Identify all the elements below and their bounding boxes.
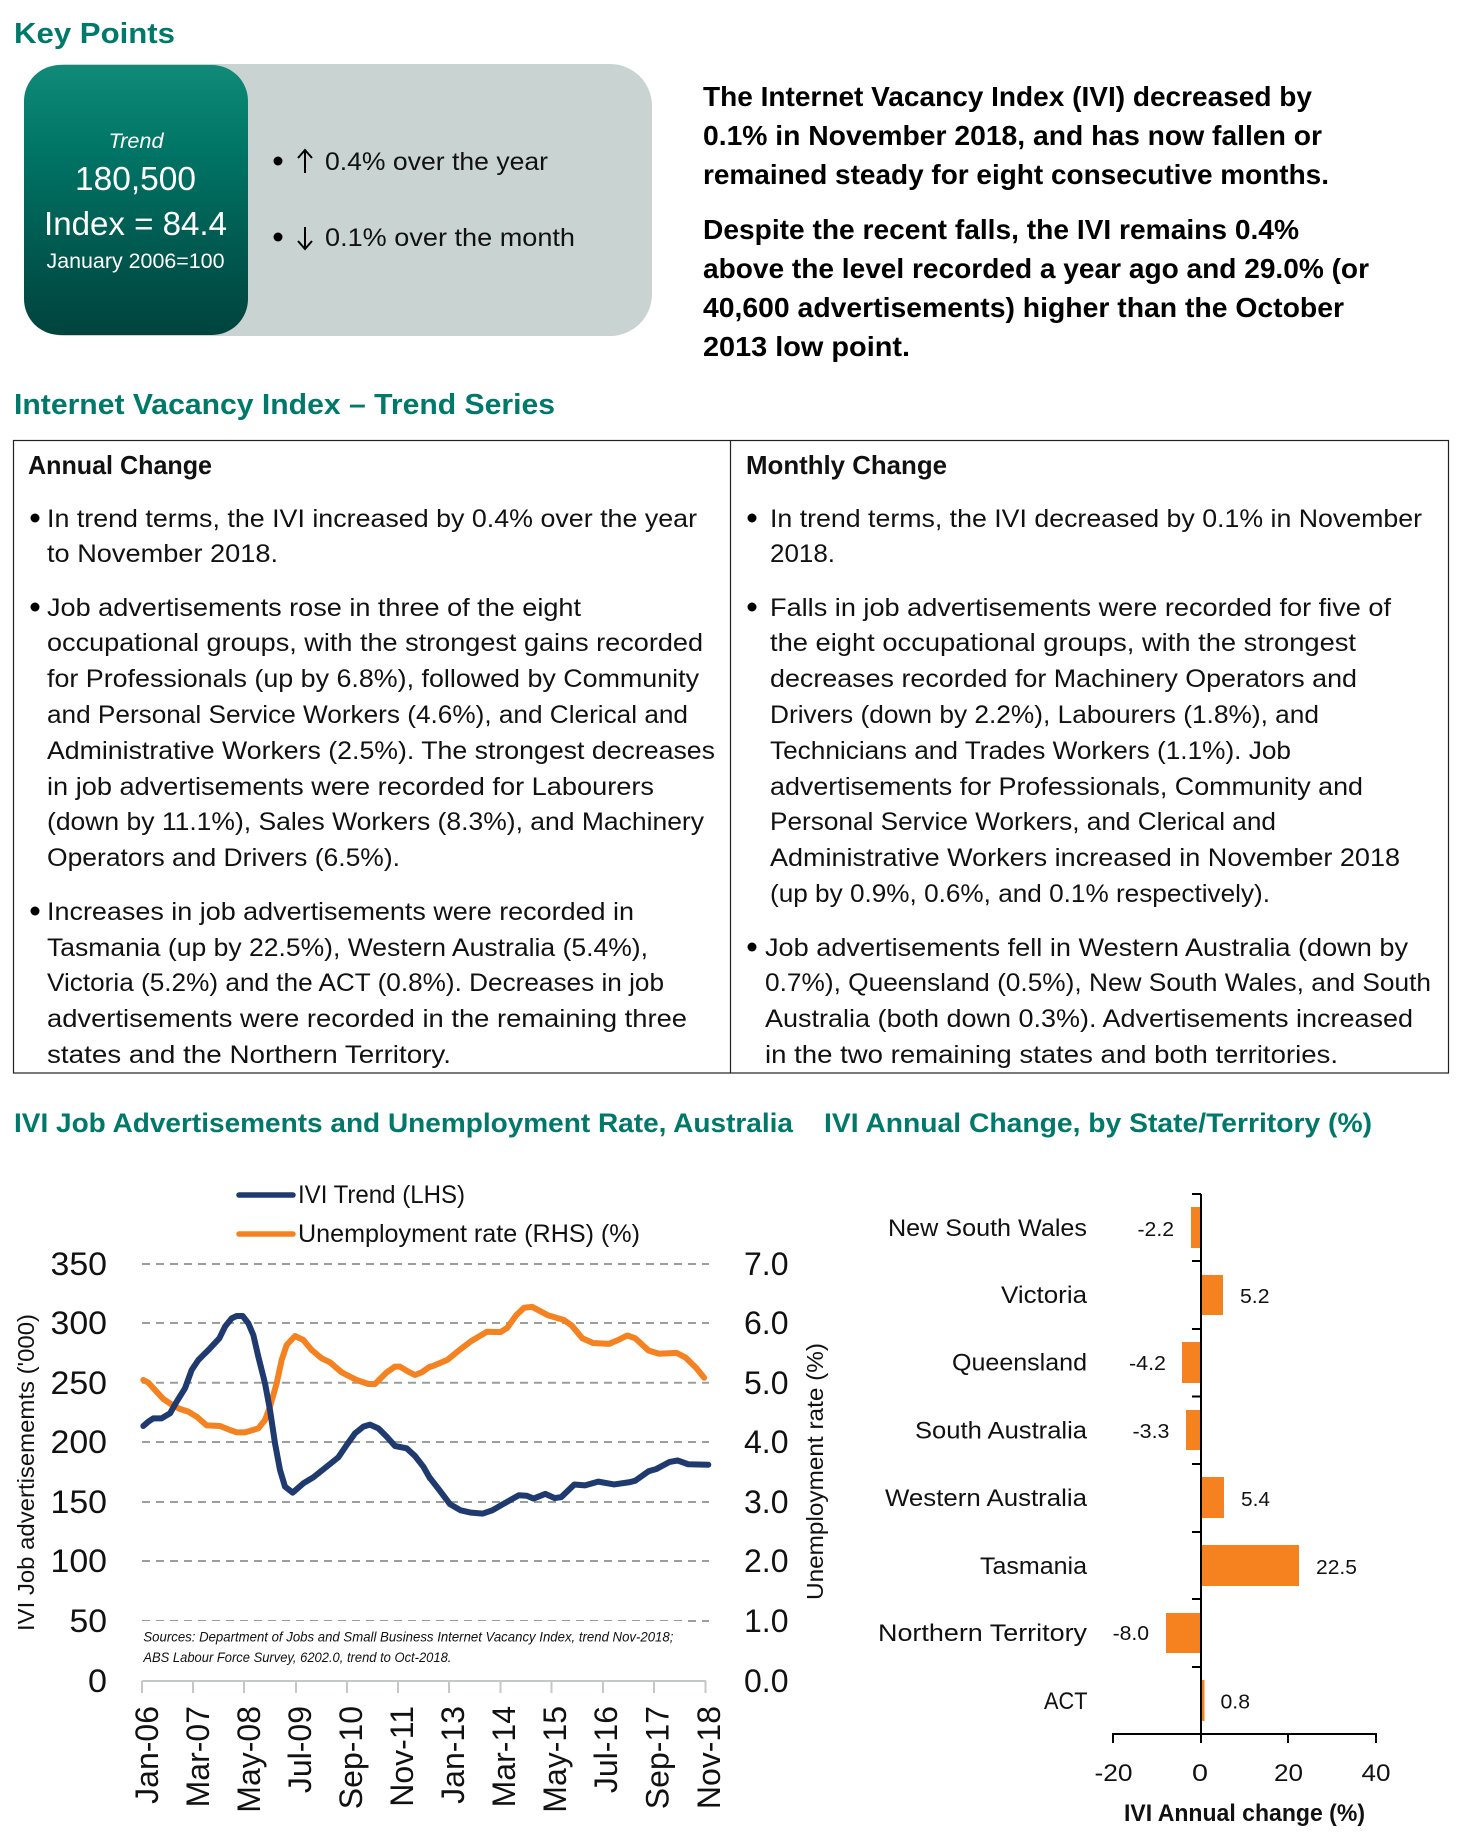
panel: monthly change: Australia (both down 0.3%). Advertisements increased	[765, 1005, 1413, 1033]
category labels	[878, 1215, 1088, 1715]
legend	[239, 1181, 640, 1248]
panel: annual change: Increases in job advertisements were recorded in	[47, 898, 634, 926]
panel: annual change: Annual Change	[28, 450, 212, 480]
right axis labels: 3.0	[744, 1484, 788, 1520]
value labels: 5.2	[1240, 1286, 1270, 1308]
heading: Key Points: Key Points	[14, 18, 175, 50]
panel: annual change: Administrative Workers (2.5%). The strongest decreases	[47, 737, 715, 765]
left axis labels: 50	[70, 1603, 107, 1639]
x axis	[142, 1681, 706, 1693]
panel: annual change: Tasmania (up by 22.5%), Western Australia (5.4%),	[47, 934, 648, 962]
x tick labels: -20	[1094, 1760, 1132, 1787]
key points text: 0.1% in November 2018, and has now fallen or	[703, 120, 1322, 151]
key points text: above the level recorded a year ago and 29.0% (or	[703, 253, 1369, 284]
heading: Internet Vacancy Index: Internet Vacancy Index – Trend Series	[14, 389, 555, 421]
x axis labels: Nov-18	[691, 1706, 727, 1809]
sources note: Sources: Department of Jobs and Small Business Internet Vacancy Index, trend Nov-2018;	[143, 1628, 673, 1644]
annual movement: 0.4% over the year	[325, 148, 548, 176]
y axis title left: IVI Job advertisememts ('000)	[13, 1314, 39, 1631]
panel: annual change: In trend terms, the IVI increased by 0.4% over the year	[47, 505, 697, 533]
x axis title: IVI Annual change (%)	[1124, 1800, 1365, 1827]
left axis labels: 200	[50, 1424, 107, 1460]
x tick labels	[1094, 1760, 1390, 1787]
key points text: Despite the recent falls, the IVI remains 0.4%	[703, 214, 1299, 245]
panel: annual change: Operators and Drivers (6.5%).	[47, 844, 400, 872]
panel: annual change: to November 2018.	[47, 540, 278, 568]
line chart	[13, 1181, 828, 1813]
y axis title right: Unemployment rate (%)	[802, 1343, 828, 1600]
panel: monthly change: Administrative Workers increased in November 2018	[770, 844, 1400, 872]
panel: annual change: Job advertisements rose in three of the eight	[47, 594, 581, 622]
left axis labels: 0	[88, 1663, 107, 1699]
right axis labels	[744, 1246, 788, 1699]
x axis labels: Jul-16	[588, 1706, 624, 1793]
panel: annual change: (down by 11.1%), Sales Workers (8.3%), and Machinery	[47, 808, 705, 836]
left axis labels: 250	[50, 1365, 107, 1401]
x axis labels	[129, 1706, 727, 1813]
legend: IVI Trend (LHS)	[298, 1181, 465, 1209]
value labels: 0.8	[1220, 1692, 1250, 1714]
x axis labels: Sep-17	[640, 1706, 676, 1809]
panel: monthly change: Technicians and Trades Workers (1.1%). Job	[770, 737, 1291, 765]
panel: monthly change: 2018.	[770, 540, 835, 568]
value labels	[1113, 1219, 1357, 1714]
right axis labels: 6.0	[744, 1305, 788, 1341]
bars	[1166, 1207, 1299, 1721]
x axis labels: Mar-14	[486, 1706, 522, 1807]
left axis labels: 150	[50, 1484, 107, 1520]
key points text: remained steady for eight consecutive months.	[703, 159, 1329, 190]
panel: annual change: for Professionals (up by 6.8%), followed by Community	[47, 665, 700, 693]
heading: line chart: IVI Job Advertisements and Unemployment Rate, Australia	[14, 1108, 794, 1138]
key points text	[703, 81, 1369, 362]
key points text: The Internet Vacancy Index (IVI) decreased by	[703, 81, 1312, 112]
right axis labels: 1.0	[744, 1603, 788, 1639]
panel: annual change	[28, 450, 715, 1069]
right axis labels: 4.0	[744, 1424, 788, 1460]
panel: monthly change: decreases recorded for Machinery Operators and	[770, 665, 1357, 693]
left axis labels: 300	[50, 1305, 107, 1341]
panel: monthly change: (up by 0.9%, 0.6%, and 0.1% respectively).	[770, 880, 1270, 908]
panel: monthly change: Job advertisements fell in Western Australia (down by	[765, 934, 1409, 962]
panel: monthly change: In trend terms, the IVI decreased by 0.1% in November	[770, 505, 1422, 533]
panel: annual change: occupational groups, with the strongest gains recorded	[47, 629, 703, 657]
x axis labels: Jul-09	[282, 1706, 318, 1793]
value labels: 5.4	[1241, 1489, 1270, 1511]
value labels: -4.2	[1129, 1353, 1166, 1375]
panel: monthly change	[746, 450, 1431, 1069]
category labels: ACT	[1044, 1688, 1088, 1715]
x axis labels: Nov-11	[384, 1706, 420, 1807]
panel: annual change: in job advertisements were recorded for Labourers	[47, 773, 654, 801]
right axis labels: 5.0	[744, 1365, 788, 1401]
x tick labels: 0	[1192, 1760, 1208, 1787]
panel: headline figures	[24, 64, 652, 336]
right axis labels: 2.0	[744, 1543, 788, 1579]
panel: monthly change: 0.7%), Queensland (0.5%), New South Wales, and South	[765, 969, 1431, 997]
left axis labels	[50, 1246, 107, 1699]
x axis labels: May-08	[231, 1706, 267, 1813]
grey summary panel	[24, 64, 652, 336]
left axis labels: 100	[50, 1543, 107, 1579]
category labels: New South Wales	[888, 1215, 1087, 1242]
x axis labels: May-15	[537, 1706, 573, 1813]
heading: bar chart: IVI Annual Change, by State/Territory (%)	[824, 1108, 1372, 1138]
value labels: -3.3	[1132, 1421, 1170, 1443]
panel: annual change: Victoria (5.2%) and the ACT (0.8%). Decreases in job	[47, 969, 664, 997]
sources note: ABS Labour Force Survey, 6202.0, trend to Oct-2018.	[142, 1649, 451, 1665]
axes	[1113, 1194, 1376, 1743]
x tick labels: 20	[1274, 1760, 1303, 1787]
category labels: Queensland	[952, 1350, 1087, 1376]
x axis labels: Jan-06	[129, 1706, 165, 1804]
key points text: 2013 low point.	[703, 331, 910, 362]
right axis labels: 7.0	[744, 1246, 788, 1282]
panel: annual change: states and the Northern Territory.	[47, 1041, 451, 1069]
panel: monthly change: advertisements for Professionals, Community and	[770, 773, 1363, 801]
green trend card: Index = 84.4	[44, 205, 227, 242]
category labels: Victoria	[1001, 1282, 1088, 1309]
series: unemployment rate	[143, 1307, 704, 1432]
bar chart	[878, 1194, 1390, 1827]
table frame	[14, 440, 1448, 1073]
left axis labels: 350	[50, 1246, 107, 1282]
green trend card: 180,500	[75, 160, 196, 197]
green trend card: January 2006=100	[46, 250, 224, 273]
green trend card: Trend	[108, 130, 165, 153]
value labels: -8.0	[1113, 1623, 1149, 1645]
green trend card	[24, 65, 248, 335]
panel: monthly change: Falls in job advertisements were recorded for five of	[770, 594, 1391, 622]
right axis labels: 0.0	[744, 1663, 788, 1699]
series: IVI trend	[143, 1316, 708, 1514]
panel: annual change: advertisements were recorded in the remaining three	[47, 1005, 687, 1033]
panel: annual change: and Personal Service Workers (4.6%), and Clerical and	[47, 701, 688, 729]
panel: monthly change: Monthly Change	[746, 450, 947, 480]
x tick labels: 40	[1362, 1760, 1390, 1787]
panel: monthly change: Drivers (down by 2.2%), Labourers (1.8%), and	[770, 701, 1319, 729]
category labels: Western Australia	[885, 1485, 1088, 1512]
value labels: -2.2	[1138, 1219, 1174, 1241]
category labels: Tasmania	[980, 1553, 1088, 1580]
category labels: South Australia	[915, 1418, 1088, 1444]
panel: monthly change: Personal Service Workers, and Clerical and	[770, 808, 1276, 836]
x axis labels: Mar-07	[180, 1706, 216, 1807]
key points text: 40,600 advertisements) higher than the October	[703, 292, 1344, 323]
panel: monthly change: in the two remaining states and both territories.	[765, 1041, 1338, 1069]
x axis labels: Sep-10	[333, 1706, 369, 1809]
value labels: 22.5	[1316, 1557, 1357, 1579]
sources note	[142, 1628, 673, 1665]
panel: monthly change: the eight occupational groups, with the strongest	[770, 629, 1356, 657]
x axis labels: Jan-13	[435, 1706, 471, 1804]
monthly movement: 0.1% over the month	[325, 224, 575, 252]
legend: Unemployment rate (RHS) (%)	[298, 1220, 640, 1248]
category labels: Northern Territory	[878, 1620, 1087, 1647]
